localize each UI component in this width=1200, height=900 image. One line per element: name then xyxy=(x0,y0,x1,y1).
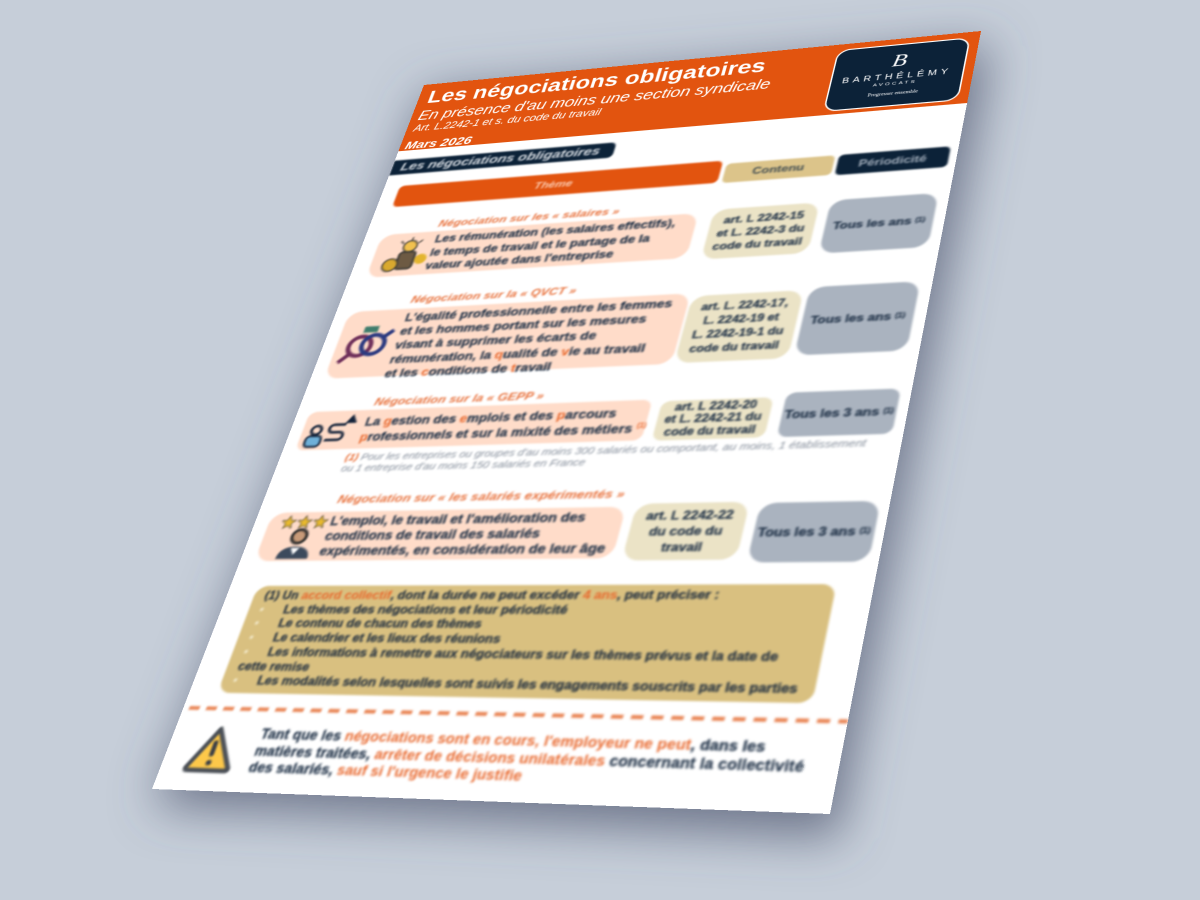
row 4 content xyxy=(621,502,750,560)
row 1 heading: Négociation sur les « salaires » xyxy=(437,206,621,229)
row 4 content: art. L 2242-22 xyxy=(645,508,735,522)
accord text xyxy=(231,588,799,696)
row 2 text: et les hommes portant sur les mesures xyxy=(398,312,648,337)
column head: theme: Thème xyxy=(533,178,574,191)
row 3 text: La gestion des emplois et des parcours xyxy=(363,407,618,428)
accord text: • Les thèmes des négociations et leur périodicité xyxy=(257,603,569,617)
row 2 text: visant à supprimer les écarts de xyxy=(393,329,598,351)
row 4 content: du code du xyxy=(648,524,724,538)
section label: Les négociations obligatoires xyxy=(399,145,602,173)
footnote: (1) Pour les entreprises ou groupes d'au moins 300 salariés ou comportant, au moins, 1 établissement xyxy=(343,438,867,463)
title: Les négociations obligatoires xyxy=(425,55,769,107)
row 1 periodicity: Tous les ans xyxy=(832,216,913,232)
header banner xyxy=(398,31,981,151)
row 1 content xyxy=(701,202,820,260)
icon: gender symbols xyxy=(335,324,396,365)
row 2 content: art. L. 2242-17, xyxy=(700,298,790,313)
legal reference: Art. L.2242-1 et s. du code du travail xyxy=(412,106,603,134)
row 1 text: valeur ajoutée dans l'entreprise xyxy=(424,248,615,271)
row 1 content: art. L 2242-15 xyxy=(722,210,805,226)
row 2 content xyxy=(674,290,804,363)
row 3 theme xyxy=(295,400,653,450)
row 2 content: L. 2242-19-1 du xyxy=(691,326,785,341)
accord text: • Le calendrier et les lieux des réunions xyxy=(247,631,502,646)
row 2 periodicity xyxy=(794,281,920,355)
subtitle: En présence d'au moins une section syndicale xyxy=(416,77,772,123)
accord text: • Les modalités selon lesquelles sont suivis les engagements souscrits par les parties xyxy=(231,674,799,696)
row 4 text: conditions de travail des salariés xyxy=(323,526,542,543)
row 1 periodicity: (1) xyxy=(915,217,926,224)
row 2 periodicity: (1) xyxy=(894,312,906,320)
row 3 periodicity xyxy=(777,388,901,437)
row 2 periodicity: Tous les ans xyxy=(809,311,892,326)
icon: money bulb xyxy=(380,236,428,274)
accord callout xyxy=(217,584,837,703)
row 1 text: le temps de travail et le partage de la xyxy=(428,232,652,258)
blurred body content xyxy=(181,142,952,784)
warning text: matières traitées, arrêter de décisions unilatérales concernant la collectivité xyxy=(253,743,806,775)
row 1 text xyxy=(424,217,677,271)
row 1 text: Les rémunération (les salaires effectifs), xyxy=(433,217,677,245)
accord text: • Les informations à remettre aux négociateurs sur les thèmes prévus et la date de xyxy=(241,645,780,664)
icon: senior employee xyxy=(274,514,330,560)
row 3 text xyxy=(357,407,648,445)
icon: warning xyxy=(181,725,232,775)
column head: theme xyxy=(392,161,723,207)
column head: periodicity xyxy=(835,146,951,175)
warning text: Tant que les négociations sont en cours, l'employeur ne peut, dans les xyxy=(259,726,767,755)
row 2 text: et les conditions de travail xyxy=(383,360,553,380)
logo name: BARTHÉLÉMY xyxy=(841,66,953,85)
row 4 periodicity: (1) xyxy=(859,527,871,535)
row 4 text: L'emploi, le travail et l'amélioration des xyxy=(328,510,588,528)
row 1 content: et L. 2242-3 du xyxy=(715,223,806,239)
row 4 heading: Négociation sur « les salariés expérimentés » xyxy=(336,487,627,506)
row 3 content: art. L 2242-20 xyxy=(673,399,758,413)
row 2 content: code du travail xyxy=(688,340,780,355)
row 4 text xyxy=(317,510,607,560)
warning text: des salariés, sauf si l'urgence le justifie xyxy=(246,759,524,784)
logo sub: AVOCATS xyxy=(872,79,918,88)
row 1 periodicity xyxy=(819,193,939,254)
row 3 periodicity: (1) xyxy=(883,407,895,415)
row 2 text: L'égalité professionnelle entre les femmes xyxy=(403,297,674,324)
row 2 text xyxy=(383,297,674,380)
logo xyxy=(823,37,971,112)
infographic page xyxy=(152,31,981,814)
column head: content xyxy=(721,155,835,183)
column head: content: Contenu xyxy=(751,162,806,176)
row 1 theme xyxy=(366,213,699,278)
column head: periodicity: Périodicité xyxy=(857,153,928,169)
accord text: (1) Un accord collectif, dont la durée ne peut excéder 4 ans, peut préciser : xyxy=(263,588,721,602)
warning text xyxy=(246,726,806,784)
accord text: • Le contenu de chacun des thèmes xyxy=(252,617,484,631)
row 3 content: et L. 2242-21 du xyxy=(663,411,763,426)
row 2 theme xyxy=(324,293,691,379)
accord text: cette remise xyxy=(236,659,312,674)
row 2 content: L. 2242-19 et xyxy=(702,312,780,327)
row 4 periodicity: Tous les 3 ans xyxy=(756,524,857,539)
row 4 theme xyxy=(254,507,626,561)
row 3 heading: Négociation sur la « GEPP » xyxy=(373,389,546,408)
logo mark: B xyxy=(890,49,909,70)
row 4 content: travail xyxy=(660,540,704,554)
row 4 text: expérimentés, en considération de leur âge xyxy=(317,541,607,558)
row 3 content xyxy=(651,397,774,441)
row 1 content: code du travail xyxy=(711,236,803,252)
row 3 periodicity: Tous les 3 ans xyxy=(783,405,881,421)
row 2 text: rémunération, la qualité de vie au travail xyxy=(388,341,647,366)
footnote: ou 1 entreprise d'au moins 150 salariés en France xyxy=(339,457,587,474)
row 2 heading: Négociation sur la « QVCT » xyxy=(409,285,578,305)
row 3 text: professionnels et sur la mixité des métiers (1) xyxy=(358,422,647,444)
row 4 periodicity xyxy=(747,501,881,563)
footnote xyxy=(339,438,868,474)
logo tagline: Progresser ensemble xyxy=(867,88,918,98)
date: Mars 2026 xyxy=(403,134,474,152)
icon: career paths xyxy=(301,414,358,450)
row 3 content: code du travail xyxy=(662,424,757,438)
